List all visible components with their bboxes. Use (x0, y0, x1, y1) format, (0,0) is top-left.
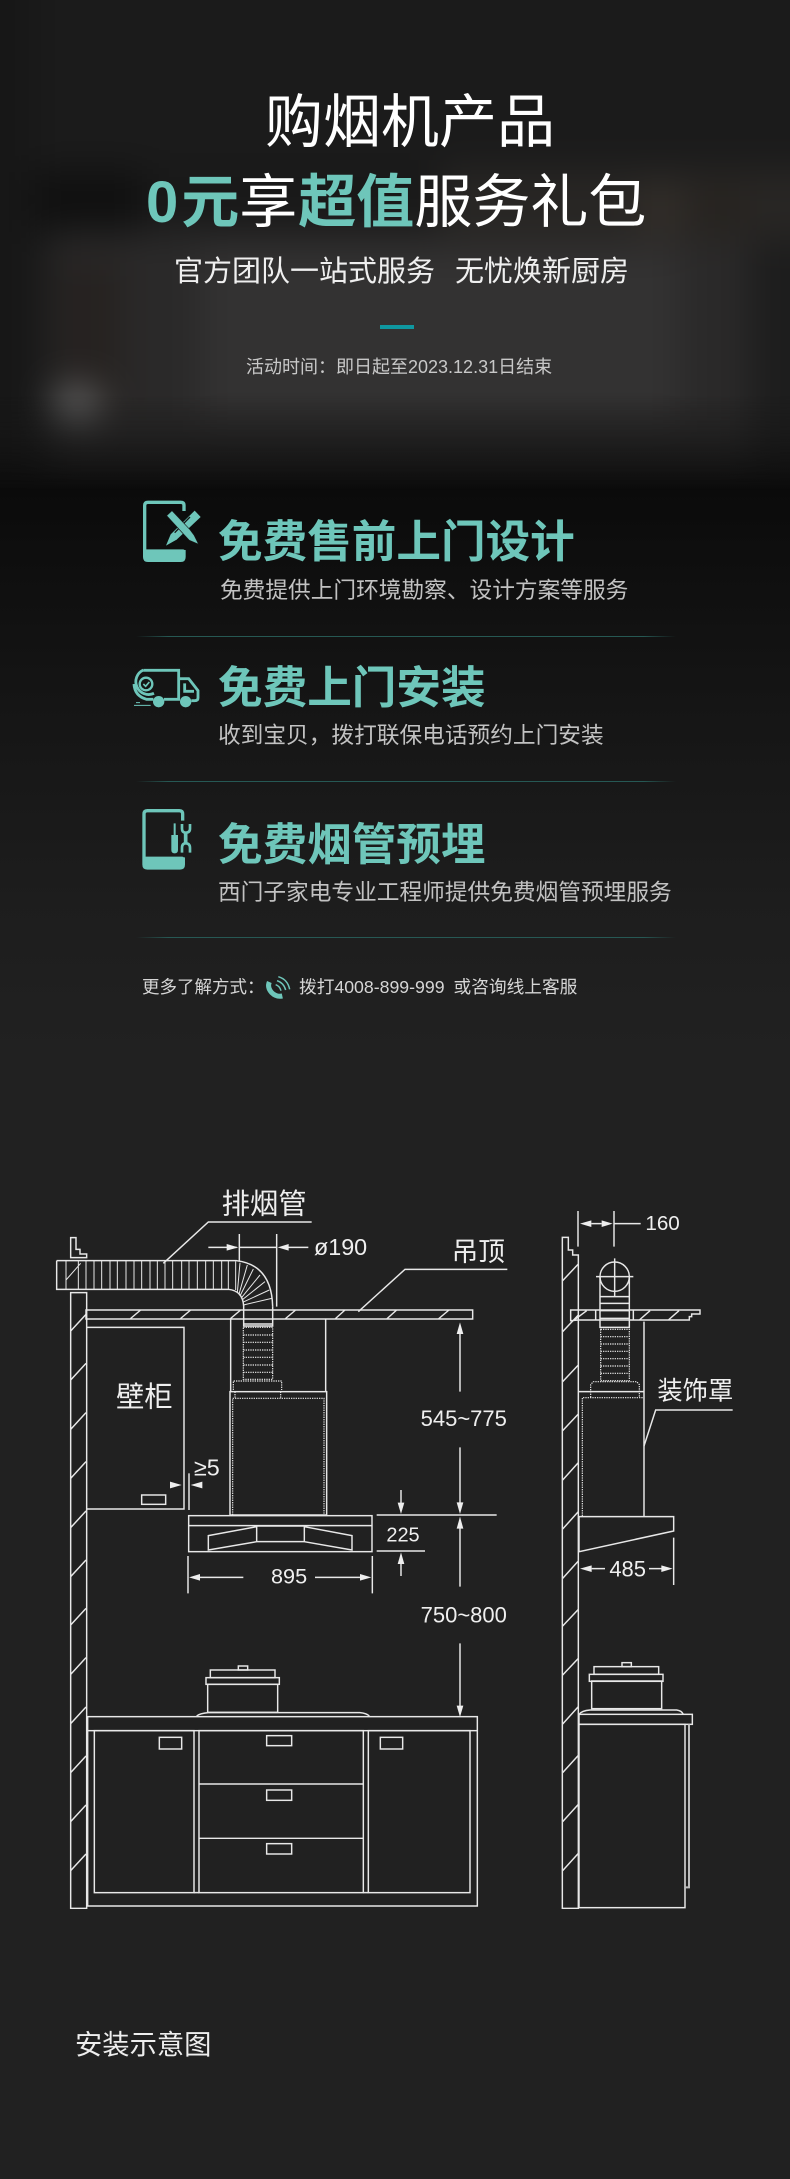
wall cabinet (87, 1327, 184, 1509)
side cover (578, 1322, 644, 1516)
dimension: 750~800 (421, 1517, 507, 1717)
dimension: clearance: ≥5 (194, 1454, 220, 1480)
decorative cover (230, 1319, 327, 1515)
ceiling (86, 1310, 473, 1319)
title line 2: 0元享超值服务礼包 (146, 170, 646, 235)
range hood (189, 1516, 372, 1552)
service 1 heading: 免费售前上门设计 (218, 518, 575, 567)
service 3 text: 西门子家电专业工程师提供免费烟管预埋服务 (218, 879, 672, 905)
side wall (562, 1237, 578, 1908)
dimension: clearance (170, 1454, 220, 1510)
duct (57, 1261, 273, 1379)
label: ceiling (358, 1237, 507, 1312)
side pot (579, 1663, 683, 1714)
label: exhaust pipe: 排烟管 (222, 1188, 307, 1220)
side ceiling (571, 1310, 700, 1321)
dimension: 895 (188, 1556, 372, 1593)
label: exhaust pipe (163, 1188, 312, 1263)
blurred kitchen background (28, 148, 790, 460)
label: ceiling: 吊顶 (452, 1237, 505, 1267)
caption: 安装示意图 (75, 2029, 211, 2060)
side hood (579, 1517, 674, 1552)
dimension: 750~800: 750~800 (421, 1603, 507, 1628)
campaign date: 活动时间：即日起至2023.12.31日结束 (246, 357, 552, 377)
dimension: 160 (578, 1211, 680, 1247)
dimension: 485: 485 (609, 1557, 646, 1582)
wall cabinet: 壁柜 (116, 1382, 173, 1414)
service 1 text: 免费提供上门环境勘察、设计方案等服务 (220, 577, 628, 603)
pot and stove (197, 1666, 369, 1716)
dimension: diameter 190 (208, 1234, 367, 1307)
side cabinet (579, 1714, 692, 1908)
wall bracket (71, 1238, 87, 1258)
service 2 heading: 免费上门安装 (218, 664, 486, 713)
title line 1: 购烟机产品 (265, 90, 555, 155)
dimension: 545~775: 545~775 (421, 1406, 507, 1431)
service 3 heading: 免费烟管预埋 (218, 821, 486, 870)
dimension: 895: 895 (271, 1563, 307, 1588)
dimension: 225 (377, 1490, 497, 1576)
service 2 text: 收到宝贝，拨打联保电话预约上门安装 (218, 722, 604, 748)
more info label: 更多了解方式： (142, 977, 264, 997)
dimension: 545~775 (421, 1322, 507, 1514)
subtitle: 官方团队一站式服务 无忧焕新厨房 (174, 256, 629, 288)
dimension: 225: 225 (386, 1525, 420, 1547)
teal accent bar (380, 325, 414, 329)
dimension: 160: 160 (645, 1212, 680, 1235)
wall (71, 1293, 87, 1908)
side duct (582, 1258, 643, 1516)
label: decorative cover (644, 1378, 733, 1446)
dimension: diameter 190: ø190 (314, 1234, 367, 1260)
dimension: 485 (580, 1538, 674, 1585)
base cabinets (88, 1717, 477, 1906)
label: decorative cover: 装饰罩 (657, 1378, 733, 1406)
contact text: 拨打4008-899-999 或咨询线上客服 (299, 977, 577, 997)
